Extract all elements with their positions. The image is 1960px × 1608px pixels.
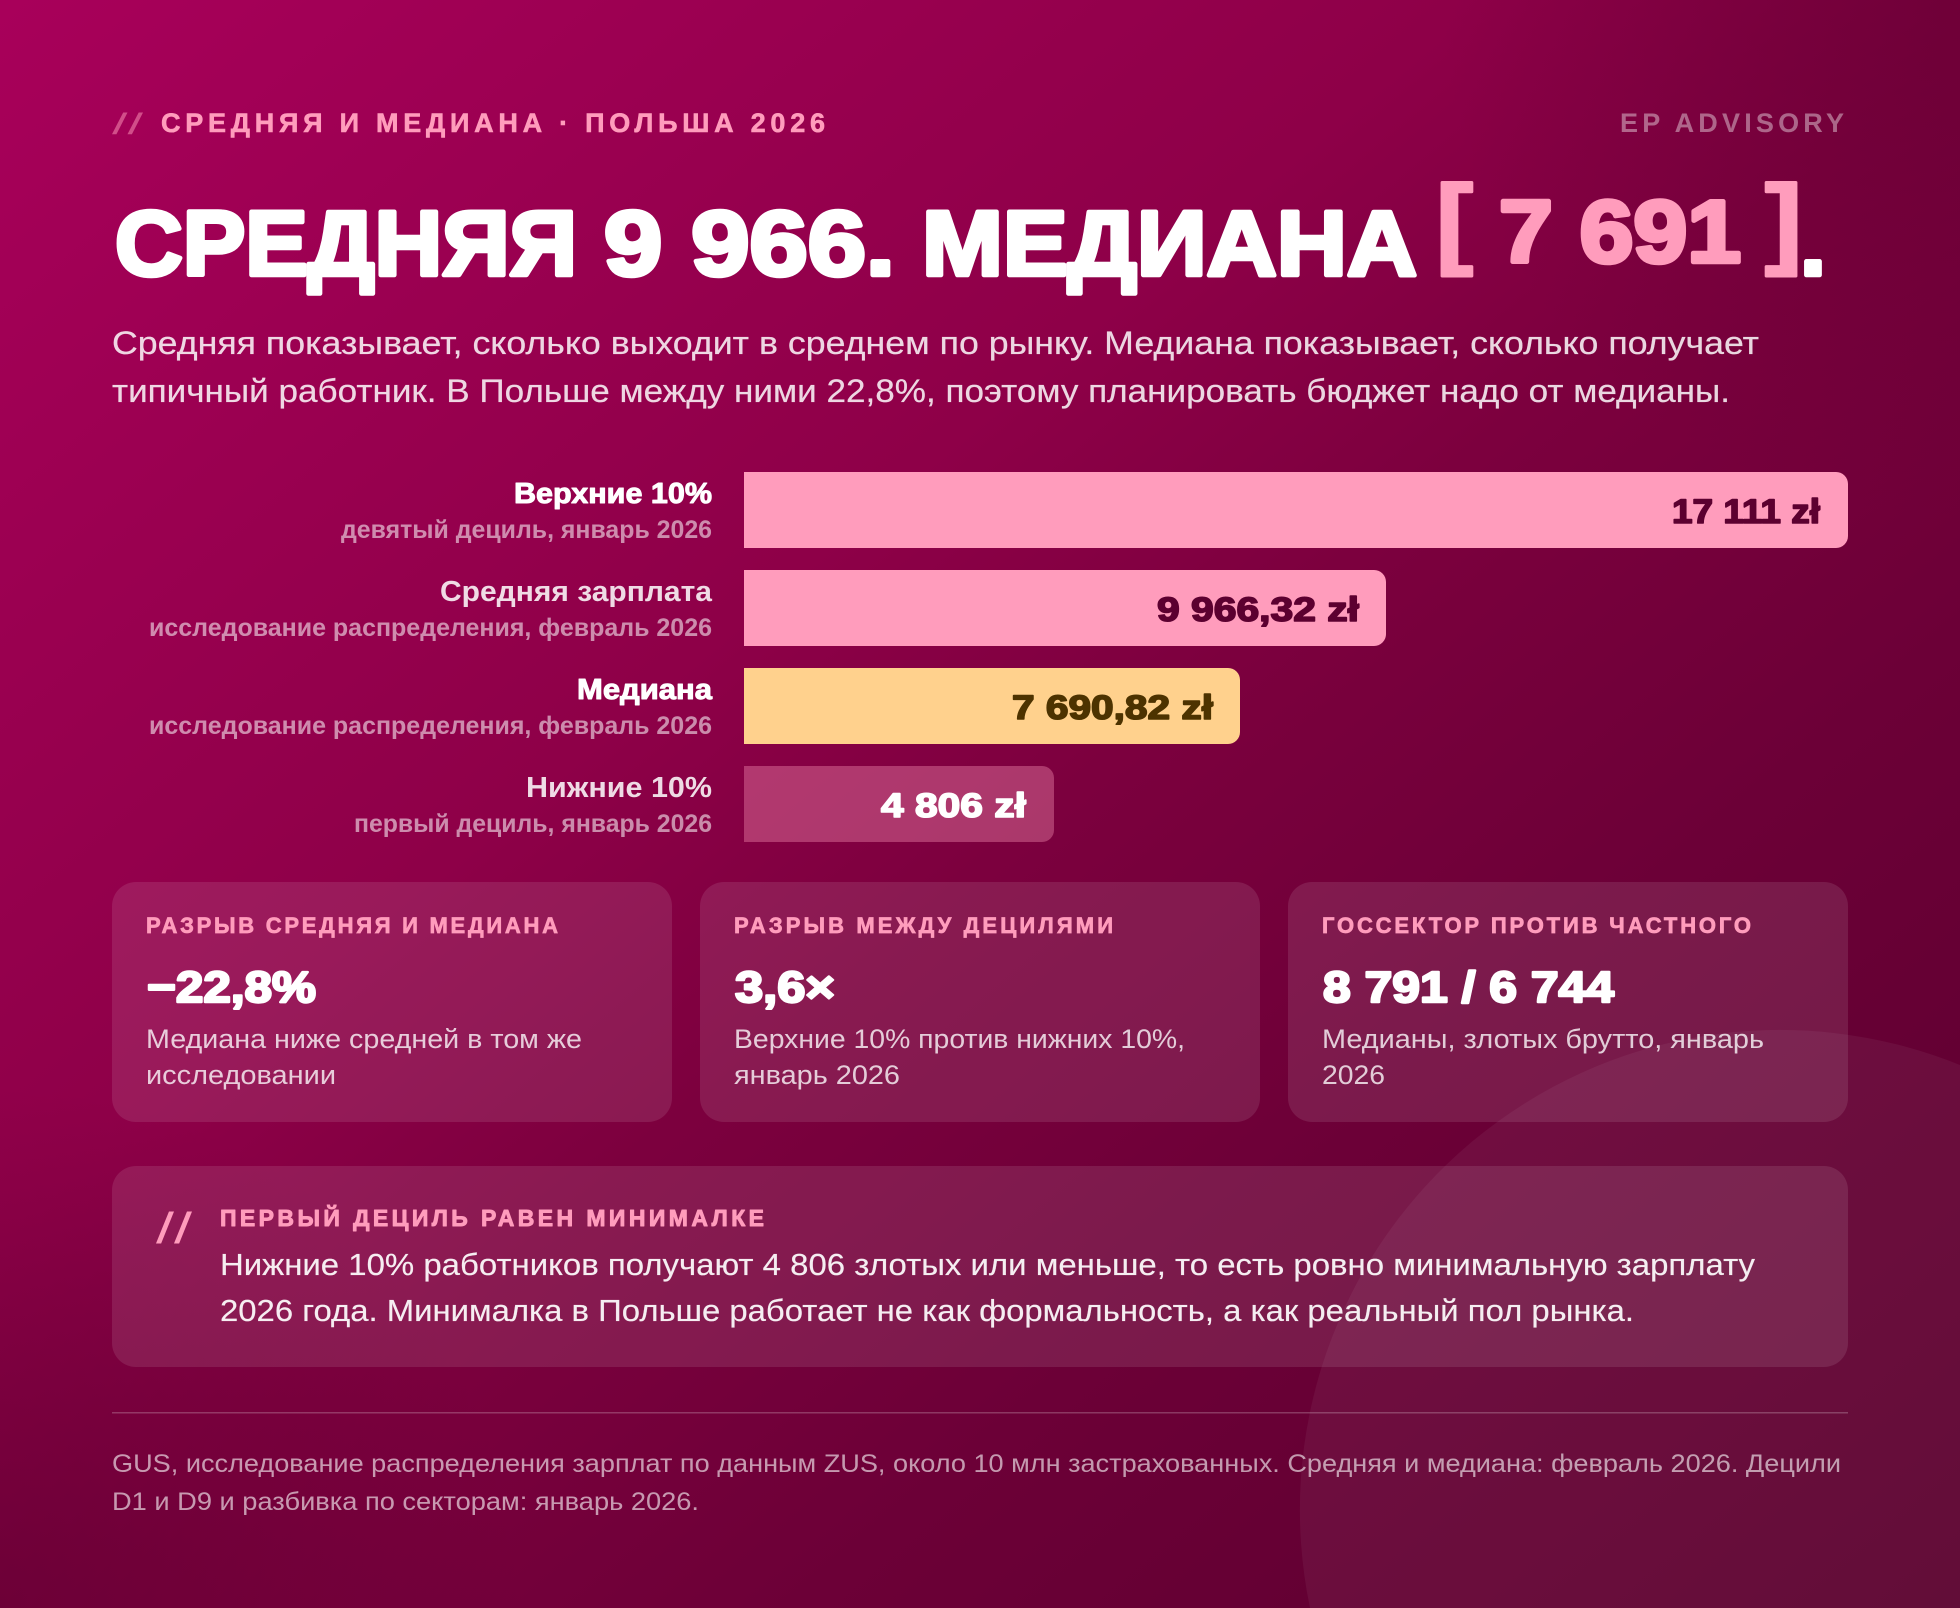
title highlight: median value in brackets: ] <box>1765 165 1802 277</box>
row: median <box>149 668 1240 744</box>
card: decile gap: 3,6× <box>735 963 835 1012</box>
subtitle <box>112 325 1759 409</box>
card: decile gap: РАЗРЫВ МЕЖДУ ДЕЦИЛЯМИ <box>734 913 1113 938</box>
card: public vs private sector: 8 791 / 6 744 <box>1323 963 1615 1012</box>
callout: ПЕРВЫЙ ДЕЦИЛЬ РАВЕН МИНИМАЛКЕ <box>220 1204 764 1231</box>
subtitle: Средняя показывает, сколько выходит в среднем по рынку. Медиана показывает, сколько получает <box>112 325 1759 361</box>
row: median: Медиана <box>577 674 713 706</box>
row: average salary: Средняя зарплата <box>440 576 713 608</box>
footer source note <box>112 1450 1841 1516</box>
row: average salary <box>149 570 1386 646</box>
card: public vs private sector: 2026 <box>1322 1060 1385 1090</box>
decorative circle <box>1300 1030 1960 1608</box>
callout <box>112 1166 1848 1367</box>
title highlight: median value in brackets: 7 691 <box>1499 182 1741 281</box>
card: mean vs median gap: −22,8% <box>147 963 316 1012</box>
card: decile gap: январь 2026 <box>734 1060 900 1090</box>
header eyebrow: СРЕДНЯЯ И МЕДИАНА · ПОЛЬША 2026 <box>161 108 825 138</box>
title highlight: median value in brackets <box>1436 165 1802 281</box>
row: median: 7 690,82 zł <box>1012 689 1214 727</box>
title: . <box>1800 193 1826 295</box>
row: top 10 percent: Верхние 10% <box>514 478 712 510</box>
card: public vs private sector: Медианы, злотых брутто, январь <box>1322 1024 1764 1054</box>
title: МЕДИАНА <box>922 193 1417 295</box>
footer source note: GUS, исследование распределения зарплат по данным ZUS, около 10 млн застрахованных. Средняя и медиана: февраль 2026. Децили <box>112 1450 1841 1478</box>
row: top 10 percent: 17 111 zł <box>1672 493 1821 531</box>
row: average salary: исследование распределения, февраль 2026 <box>149 614 712 642</box>
brand label: EP ADVISORY <box>1620 108 1844 138</box>
title <box>115 165 1826 295</box>
row: bottom 10 percent: Нижние 10% <box>526 772 712 804</box>
card: mean vs median gap: РАЗРЫВ СРЕДНЯЯ И МЕДИАНА <box>146 913 558 938</box>
row: top 10 percent: девятый дециль, январь 2026 <box>341 516 712 544</box>
subtitle: типичный работник. В Польше между ними 22,8%, поэтому планировать бюджет надо от медианы. <box>112 373 1730 409</box>
card: mean vs median gap <box>112 882 672 1122</box>
card: decile gap <box>700 882 1260 1122</box>
row: median: исследование распределения, февраль 2026 <box>149 712 712 740</box>
title: СРЕДНЯЯ <box>115 193 577 295</box>
card: mean vs median gap: исследовании <box>146 1060 336 1090</box>
footer source note: D1 и D9 и разбивка по секторам: январь 2026. <box>112 1488 699 1516</box>
row: bottom 10 percent: первый дециль, январь 2026 <box>354 810 712 838</box>
row: bottom 10 percent <box>354 766 1054 842</box>
callout: Нижние 10% работников получают 4 806 злотых или меньше, то есть ровно минимальную зарплату <box>220 1247 1756 1282</box>
title: 9 966. <box>604 193 895 295</box>
card: public vs private sector: ГОССЕКТОР ПРОТИВ ЧАСТНОГО <box>1322 913 1751 938</box>
bar chart <box>149 472 1848 842</box>
row: top 10 percent <box>341 472 1848 548</box>
title highlight: median value in brackets: [ <box>1436 165 1473 277</box>
card: public vs private sector <box>1288 882 1848 1122</box>
row: average salary: 9 966,32 zł <box>1157 591 1360 629</box>
callout: 2026 года. Минималка в Польше работает не как формальность, а как реальный пол рынка. <box>220 1293 1634 1328</box>
header eyebrow: // <box>112 108 144 141</box>
card: decile gap: Верхние 10% против нижних 10%, <box>734 1024 1185 1054</box>
row: bottom 10 percent: 4 806 zł <box>881 787 1027 825</box>
card: mean vs median gap: Медиана ниже средней в том же <box>146 1024 582 1054</box>
callout: // <box>156 1204 193 1253</box>
